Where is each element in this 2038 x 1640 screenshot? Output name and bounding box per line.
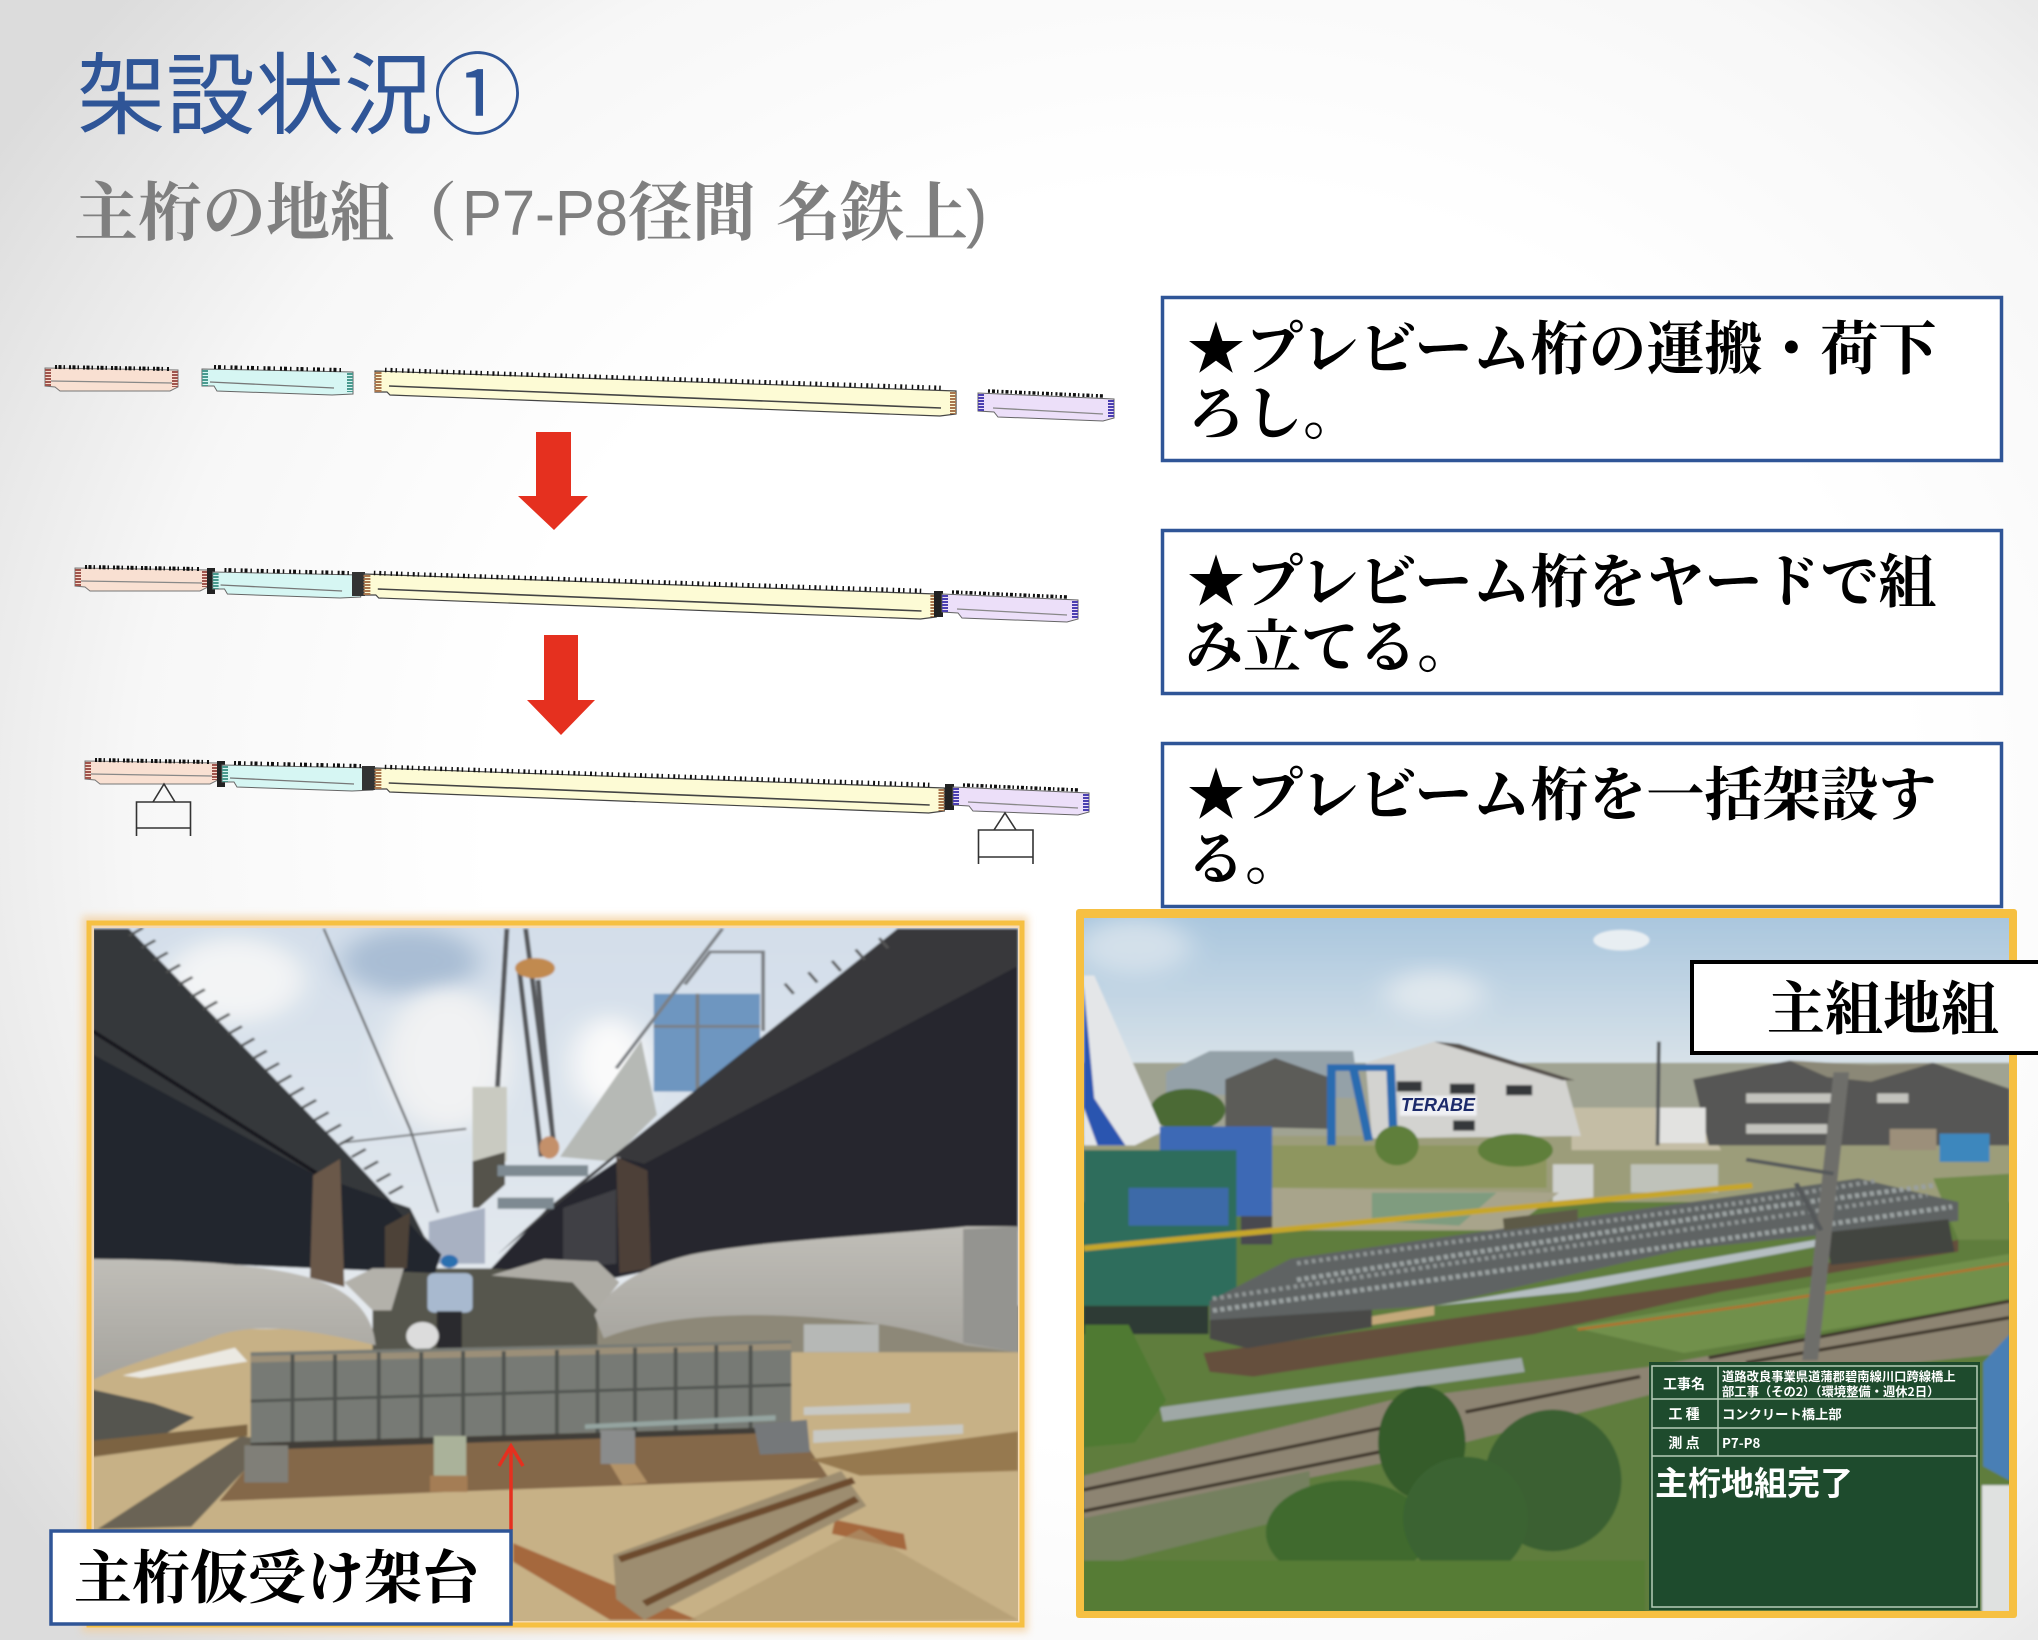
- right edge: [1983, 1334, 2009, 1480]
- title: 架設状況①: [77, 24, 522, 153]
- label: main girder assembly: [1692, 962, 2038, 1053]
- label: main girder assembly: 主組地組: [1767, 977, 1999, 1042]
- subtitle: 主桁の地組: [74, 178, 394, 249]
- photo: yard assembled main girders: [1076, 909, 2017, 1618]
- distant ground: [1084, 1062, 2009, 1138]
- pole: [1802, 1072, 1849, 1360]
- left girder: [94, 1053, 442, 1274]
- steel support frame: [251, 1341, 791, 1443]
- text: TERABE: TERABE: [1401, 1095, 1476, 1115]
- callout: transport and unloading: [1162, 298, 2002, 460]
- subtitle: ): [966, 177, 987, 249]
- callout: yard assembly: み立てる。: [1185, 615, 1475, 680]
- sign board: 主桁地組完了: [1655, 1457, 1853, 1505]
- right girder: [491, 929, 1018, 1278]
- subtitle: 径間: [628, 178, 756, 249]
- callout: transport and unloading: ろし。: [1187, 382, 1361, 447]
- diagram: girder erected on supports: [85, 760, 1089, 864]
- rusty channel and timber: [513, 1543, 698, 1620]
- subtitle: [74, 177, 987, 249]
- sign board: コンクリート橋上部: [1722, 1404, 1842, 1423]
- yellow fence beam: [1084, 1185, 1752, 1248]
- ground shadows and boards: [219, 1431, 829, 1501]
- callout: bulk erection: ★プレビーム桁を一括架設す: [1187, 763, 1936, 828]
- ground: [85, 1329, 1022, 1627]
- concrete wings: [344, 1268, 404, 1310]
- callout: bulk erection: る。: [1187, 827, 1303, 892]
- sign board: 工事名: [1663, 1374, 1705, 1394]
- tent and scaffold: [560, 1040, 657, 1161]
- callout: transport and unloading: ★プレビーム桁の運搬・荷下: [1187, 317, 1937, 382]
- arrow: down to yard assembly: [518, 432, 588, 530]
- left temporary support: [136, 784, 190, 836]
- arrow: down to bulk erection: [527, 635, 595, 735]
- label: temporary girder support: 主桁仮受け架台: [74, 1546, 482, 1611]
- subtitle: 名鉄上: [776, 178, 968, 249]
- sign board: 部工事（その2）（環境整備・週休2日）: [1722, 1382, 1939, 1400]
- photo: temporary girder support frame: [82, 916, 1028, 1632]
- foreground trees: [1084, 1471, 1310, 1570]
- clutter behind the frame: [372, 1268, 610, 1357]
- sign board: P7-P8: [1722, 1433, 1761, 1452]
- girders: [1210, 1178, 1958, 1320]
- sign board: 工 種: [1668, 1404, 1700, 1424]
- grass and rail tracks: [1572, 1254, 2009, 1353]
- diagram: girder assembled in yard: [75, 567, 1078, 622]
- callout: yard assembly: ★プレビーム桁をヤードで組: [1187, 550, 1936, 615]
- callout: bulk erection: [1162, 744, 2002, 906]
- buildings: [1166, 1051, 1359, 1098]
- sign board: [1649, 1362, 1980, 1610]
- worker: [428, 1273, 472, 1313]
- yard dirt: [1272, 1188, 1559, 1230]
- arrow: points at temporary support: [499, 1446, 523, 1530]
- subtitle: P7-P8: [462, 177, 628, 249]
- crane and blue structure: [1084, 976, 1163, 1145]
- diagram: separate girder segments: [45, 367, 1114, 421]
- label: temporary girder support: [51, 1531, 511, 1624]
- callout: yard assembly: [1162, 530, 2002, 694]
- timber deck: [1203, 1240, 1958, 1377]
- crane rigging: [498, 929, 554, 1157]
- sign board: 測 点: [1668, 1433, 1700, 1453]
- gantry: [1331, 1068, 1394, 1145]
- subtitle: （: [393, 178, 457, 249]
- sign board: 道路改良事業県道蒲郡碧南線川口跨線橋上: [1722, 1367, 1956, 1385]
- support legs: [434, 1436, 466, 1478]
- right temporary support: [978, 813, 1033, 864]
